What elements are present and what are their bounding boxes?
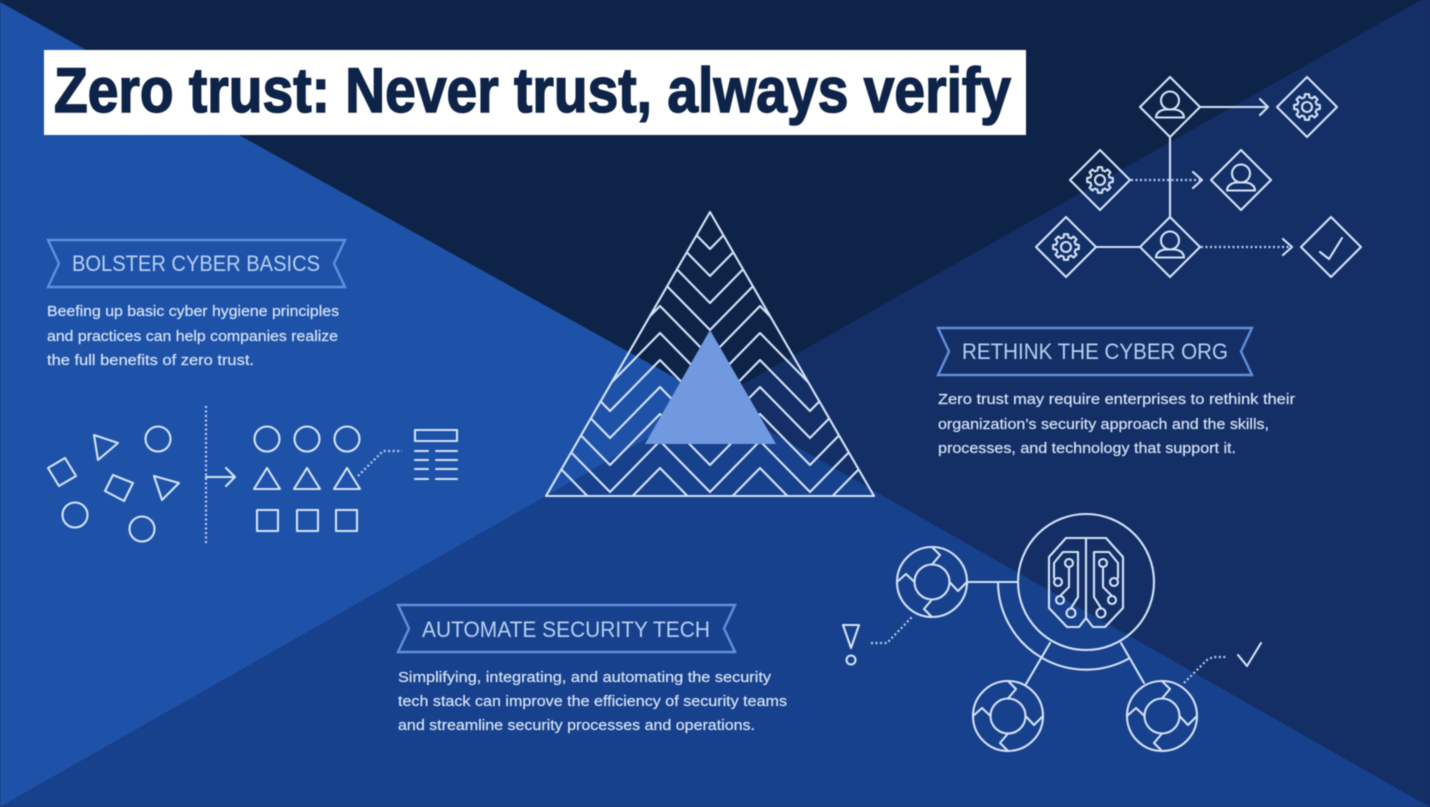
- text block: bolster cyber basics: [47, 303, 339, 369]
- central triangle with chevron pattern: [544, 210, 876, 498]
- text block: rethink the cyber org: [938, 391, 1295, 457]
- heading ribbon: automate security tech: [398, 605, 735, 652]
- node: user top: [1140, 77, 1200, 137]
- wheel node: right: [1127, 681, 1197, 751]
- chart: scattered shapes sorted into a grid: [48, 406, 457, 544]
- icon: warning: [843, 625, 859, 664]
- wheel node: left: [897, 547, 967, 617]
- triangle outline: [546, 212, 874, 496]
- text block: automate security tech: and streamline security processes and operations.: [398, 717, 755, 734]
- dotted divider: [205, 406, 207, 544]
- text block: automate security tech: [398, 669, 787, 734]
- text block: bolster cyber basics: the full benefits of zero trust.: [47, 352, 254, 369]
- connectors: [1096, 99, 1292, 255]
- heading ribbon: bolster cyber basics: [48, 240, 345, 287]
- node: check: [1301, 217, 1361, 277]
- panel: bolster cyber basics: [47, 240, 345, 369]
- icon: list: [415, 430, 457, 479]
- heading ribbon: bolster cyber basics: BOLSTER CYBER BASICS: [72, 251, 320, 276]
- text block: automate security tech: Simplifying, integrating, and automating the security: [398, 669, 772, 686]
- heading ribbon: rethink the cyber org: RETHINK THE CYBER ORG: [962, 339, 1228, 364]
- node: user lower: [1140, 217, 1200, 277]
- panel: automate security tech: [398, 605, 787, 734]
- text block: bolster cyber basics: Beefing up basic cyber hygiene principles: [47, 303, 339, 320]
- scattered shapes: [48, 426, 179, 542]
- node: user middle right: [1211, 150, 1271, 210]
- dotted leader: check: [1184, 657, 1227, 683]
- text block: bolster cyber basics: and practices can help companies realize: [47, 328, 338, 345]
- wheel node: bottom: [973, 681, 1043, 751]
- node: gear top right: [1277, 77, 1337, 137]
- text block: automate security tech: tech stack can improve the efficiency of security teams: [398, 693, 787, 710]
- panel: rethink the cyber org: [938, 328, 1295, 457]
- heading ribbon: automate security tech: AUTOMATE SECURITY TECH: [422, 617, 710, 642]
- sorted shapes grid: [254, 426, 360, 531]
- workflow diagram: users and settings: [1036, 77, 1361, 277]
- icon: check: [1238, 643, 1261, 666]
- text block: rethink the cyber org: processes, and technology that support it.: [938, 440, 1236, 457]
- text block: rethink the cyber org: Zero trust may require enterprises to rethink their: [938, 391, 1295, 408]
- brain network diagram: [843, 514, 1261, 751]
- inner solid triangle: [645, 330, 776, 444]
- icon: circuit brain: [1049, 538, 1123, 627]
- dotted leader: warning: [871, 616, 913, 643]
- node: gear lower left: [1036, 217, 1096, 277]
- title banner: Zero trust: Never trust, always verify: [54, 56, 1011, 126]
- hub circle: [1018, 514, 1154, 650]
- text block: rethink the cyber org: organization’s security approach and the skills,: [938, 416, 1269, 433]
- chevron pattern: [561, 234, 859, 496]
- heading ribbon: rethink the cyber org: [938, 328, 1252, 375]
- arrow: sorting: [206, 468, 235, 486]
- node: gear middle: [1070, 150, 1130, 210]
- dotted leader: [358, 451, 402, 476]
- connectors and arc: [967, 582, 1144, 684]
